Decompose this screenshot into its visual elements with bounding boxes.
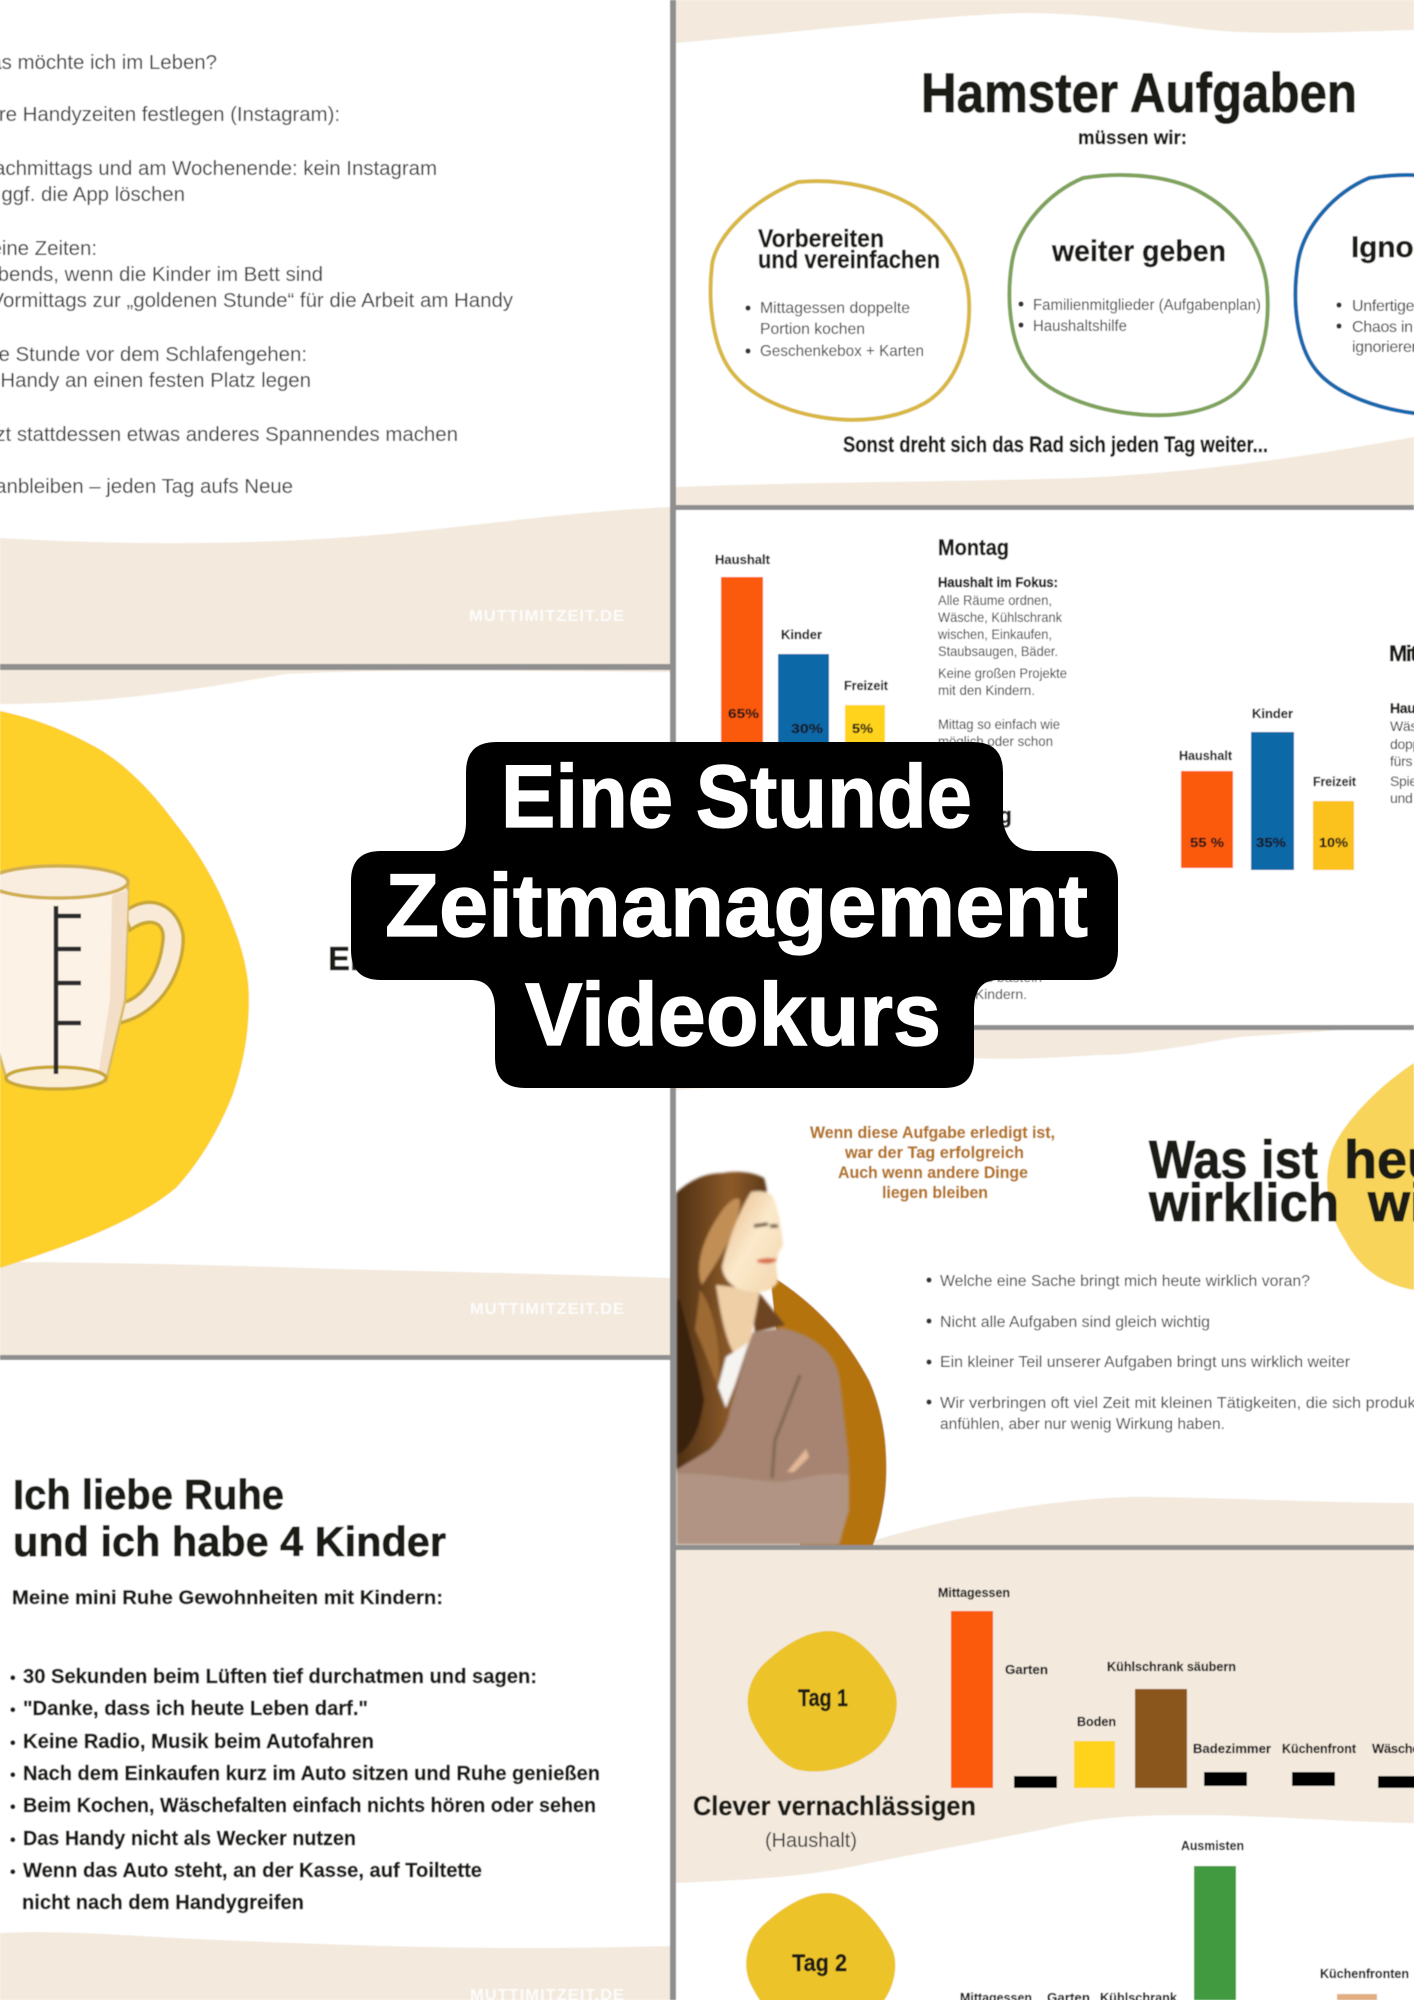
bar chart: Tag 1 (938, 1585, 1414, 1788)
bar chart: Tag 1: Badezimmer (1193, 1741, 1271, 1756)
bullet list: Nicht alle Aufgaben sind gleich wichtig (940, 1314, 1210, 1331)
text block: Mittwoch: und (1390, 790, 1412, 806)
bar chart: Dienstag: Freizeit (1313, 774, 1357, 789)
text block: Montag: Staubsaugen, Bäder. (938, 643, 1058, 659)
bar chart: Montag: 65% (728, 706, 760, 721)
heading (1148, 1130, 1414, 1233)
panel: measuring cup slide (0, 670, 670, 1355)
watermark: MUTTIMITZEIT.DE (470, 1301, 625, 1318)
bar chart: Montag: 5% (852, 721, 873, 736)
title banner: Eine Stunde (501, 746, 972, 846)
bar chart: Dienstag: 35% (1256, 835, 1286, 850)
bullet list: Das Handy nicht als Wecker nutzen (23, 1828, 356, 1850)
heading: Hamster Aufgaben (921, 61, 1357, 124)
circle: Vorbereiten und vereinfachen: Vorbereiten (758, 225, 884, 253)
text block: Montag: mit den Kindern. (938, 682, 1035, 698)
bar chart: Tag 1: Boden (1077, 1714, 1116, 1729)
bar chart: Tag 2: Ausmisten (1181, 1838, 1244, 1853)
bar chart: Tag 1: Küchenfront (1282, 1741, 1357, 1756)
blob: Tag 1: Tag 1 (798, 1685, 848, 1712)
closing line: Sonst dreht sich das Rad sich jeden Tag weiter... (843, 432, 1268, 457)
phone habits text (0, 51, 514, 498)
circle: Vorbereiten und vereinfachen: und vereinfachen (758, 246, 940, 274)
heading (13, 1471, 446, 1565)
text block: Montag: Mittag so einfach wie (938, 716, 1060, 732)
bar chart: Montag: 30% (791, 721, 824, 736)
bullet list: • (10, 1799, 16, 1816)
blob: Tag 2 (746, 1893, 895, 2000)
bar chart: Montag: Freizeit (844, 678, 889, 693)
yellow blob (0, 711, 249, 1268)
heading: Was ist (1149, 1130, 1318, 1190)
photo: woman with orange arch (676, 1172, 886, 1545)
bar chart: Montag (715, 552, 889, 757)
circle: Vorbereiten und vereinfachen (711, 181, 969, 420)
title banner: Zeitmanagement (385, 855, 1088, 955)
bullet list: anfühlen, aber nur wenig Wirkung haben. (940, 1416, 1225, 1433)
panel: Hamster Aufgaben slide (676, 0, 1414, 505)
text block: Montag (937, 535, 1067, 749)
text block: Mittwoch (1389, 641, 1414, 806)
bar chart: Montag: Kinder (781, 627, 822, 642)
heading: Ich liebe Ruhe (13, 1471, 284, 1518)
subheading: Meine mini Ruhe Gewohnheiten mit Kindern: (12, 1588, 443, 1609)
bar chart: Tag 1: Mittagessen (938, 1585, 1010, 1600)
bullet list: • (10, 1767, 16, 1784)
bullet list: 30 Sekunden beim Lüften tief durchatmen und sagen: (23, 1666, 537, 1688)
text block: Dienstag: Dienstag (919, 803, 1012, 828)
heading: Clever vernachlässigen (693, 1791, 976, 1821)
bullet list: Welche eine Sache bringt mich heute wirklich voran? (940, 1273, 1310, 1290)
circle: Vorbereiten und vereinfachen: Portion kochen (760, 321, 865, 338)
bullet list: • (10, 1670, 16, 1687)
bullet list (926, 1273, 1414, 1433)
text block: Montag: Alle Räume ordnen, (938, 592, 1052, 608)
callout: orange text: war der Tag erfolgreich (844, 1143, 1024, 1162)
bar chart: Dienstag: Kinder (1252, 706, 1293, 721)
circle: Vorbereiten und vereinfachen: Geschenkebox + Karten (760, 343, 924, 360)
blob: Tag 1 (748, 1631, 897, 1772)
text block: Dienstag (919, 803, 1042, 1002)
bullet list: • (10, 1864, 16, 1881)
heading partly hidden: Erfolg (328, 940, 423, 977)
panel: was ist heute wichtig slide (676, 1030, 1414, 1545)
circle: weiter geben: Haushaltshilfe (1033, 318, 1127, 335)
bar chart: Tag 1: Kühlschrank säubern (1107, 1659, 1236, 1674)
text block: Montag: Keine großen Projekte (938, 665, 1067, 681)
bar chart: Dienstag: 10% (1319, 835, 1348, 850)
callout: orange text: Wenn diese Aufgabe erledigt ist, (810, 1123, 1055, 1142)
callout: orange text (810, 1123, 1055, 1202)
panel: clever vernachlässigen slide (676, 1550, 1414, 2000)
text block: Dienstag: mit den Kindern. (925, 986, 1027, 1002)
bar chart: Dienstag: Haushalt (1179, 748, 1233, 763)
bar chart: Tag 2 (960, 1838, 1409, 2000)
panel: Ruhe slide (0, 1471, 670, 2000)
circle: Ignorieren (1295, 175, 1414, 415)
heading: und ich habe 4 Kinder (13, 1518, 446, 1565)
bullet list: • (10, 1735, 16, 1752)
text block: Montag: Wäsche, Kühlschrank (938, 609, 1063, 625)
bullet list: • (10, 1832, 16, 1849)
bullet list: Beim Kochen, Wäschefalten einfach nichts hören oder sehen (23, 1795, 596, 1817)
bar chart: Dienstag (1179, 706, 1357, 870)
circle: weiter geben (1009, 175, 1268, 415)
callout: orange text: liegen bleiben (882, 1183, 988, 1202)
bullet list: "Danke, dass ich heute Leben darf." (23, 1698, 368, 1720)
bar chart: Tag 2: Küchenfronten (1320, 1966, 1409, 1981)
bullet list: Nach dem Einkaufen kurz im Auto sitzen und Ruhe genießen (23, 1763, 600, 1785)
circle: weiter geben: weiter geben (1051, 235, 1226, 268)
watermark: MUTTIMITZEIT.DE (469, 608, 625, 625)
bullet list: Keine Radio, Musik beim Autofahren (23, 1731, 374, 1753)
callout: orange text: Auch wenn andere Dinge (838, 1163, 1028, 1182)
bar chart: Montag: Haushalt (715, 552, 771, 567)
heading: wirklich (1148, 1173, 1339, 1233)
circle: weiter geben: Familienmitglieder (Aufgabenplan) (1033, 297, 1261, 314)
bullet list: Ein kleiner Teil unserer Aufgaben bringt uns wirklich weiter (940, 1354, 1350, 1371)
bullet list: nicht nach dem Handygreifen (22, 1892, 304, 1914)
subheading: (Haushalt) (765, 1830, 857, 1852)
circle: Vorbereiten und vereinfachen: Mittagessen doppelte (760, 300, 910, 317)
panel: phone habits slide (0, 51, 670, 664)
bullet list (10, 1666, 600, 1914)
text block: Mittwoch: fürs (1390, 753, 1412, 769)
title banner (351, 742, 1118, 1088)
subheading: müssen wir: (1078, 128, 1187, 149)
bullet list: Wenn das Auto steht, an der Kasse, auf Toiltette (23, 1860, 482, 1882)
bar chart: Tag 1: Garten (1005, 1662, 1048, 1677)
yellow blob (1327, 1063, 1414, 1290)
panel: week plan slide (715, 535, 1414, 1002)
blob: Tag 2: Tag 2 (792, 1950, 847, 1977)
text block: Montag: Haushalt im Fokus: (938, 574, 1058, 590)
text block: Montag: Montag (938, 535, 1009, 560)
title banner: Videokurs (525, 964, 941, 1064)
text block: Dienstag: etwas basteln (956, 969, 1042, 985)
text block: Montag: möglich oder schon (938, 733, 1053, 749)
icon: measuring cup (0, 866, 183, 1089)
phone habits text: Vormittags zur „goldenen Stunde“ für die Arbeit am Handy (0, 289, 514, 312)
bullet list: • (10, 1702, 16, 1719)
bullet list: Wir verbringen oft viel Zeit mit kleinen Tätigkeiten, die sich produktiv (940, 1395, 1414, 1412)
text block: Montag: wischen, Einkaufen, (937, 626, 1052, 642)
bar chart: Dienstag: 55 % (1190, 835, 1224, 850)
